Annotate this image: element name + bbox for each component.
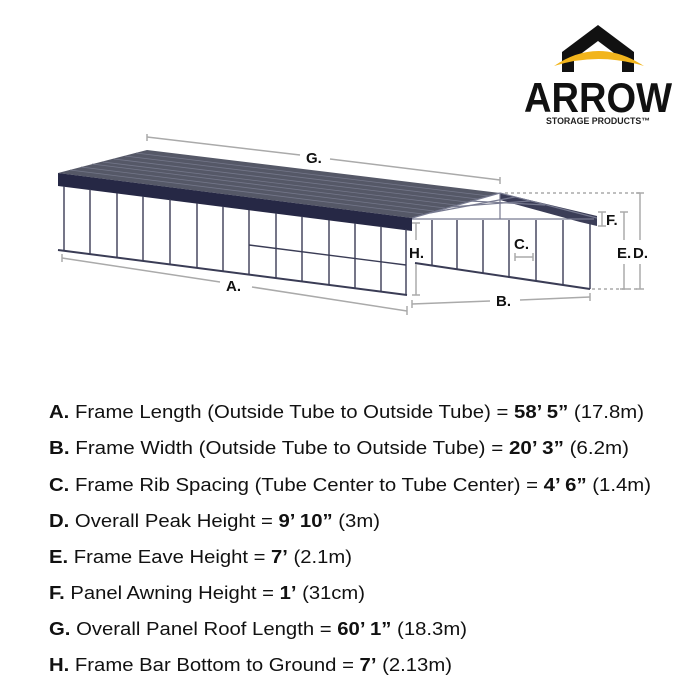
dimension labels: H. xyxy=(409,245,424,262)
dimension lines xyxy=(62,134,644,315)
dimension labels: B. xyxy=(496,293,511,310)
specification list: B. Frame Width (Outside Tube to Outside Tube) = 20’ 3” (6.2m) xyxy=(49,438,629,458)
icon: house chevron xyxy=(554,25,644,72)
dimension labels: C. xyxy=(514,236,529,253)
dimension labels: G. xyxy=(306,150,322,167)
specification list: F. Panel Awning Height = 1’ (31cm) xyxy=(49,583,365,603)
frame walls xyxy=(58,186,597,295)
specification list: E. Frame Eave Height = 7’ (2.1m) xyxy=(49,547,352,567)
carport diagram xyxy=(58,134,648,315)
specification list: G. Overall Panel Roof Length = 60’ 1” (18.3m) xyxy=(49,619,467,639)
dimension labels: D. xyxy=(633,245,648,262)
specification list xyxy=(49,402,651,675)
specification list: D. Overall Peak Height = 9’ 10” (3m) xyxy=(49,511,380,531)
specification list: H. Frame Bar Bottom to Ground = 7’ (2.13m) xyxy=(49,655,452,675)
specification list: A. Frame Length (Outside Tube to Outside Tube) = 58’ 5” (17.8m) xyxy=(49,402,644,422)
dimension labels: E. xyxy=(617,245,631,262)
dimension labels xyxy=(226,150,648,310)
roof xyxy=(58,150,597,231)
logo xyxy=(524,25,672,126)
specification list: C. Frame Rib Spacing (Tube Center to Tube Center) = 4’ 6” (1.4m) xyxy=(49,475,651,495)
dimension labels: A. xyxy=(226,278,241,295)
logo tagline: STORAGE PRODUCTS™ xyxy=(546,116,650,126)
logo wordmark: ARROW xyxy=(524,74,672,121)
dimension labels: F. xyxy=(606,212,618,229)
